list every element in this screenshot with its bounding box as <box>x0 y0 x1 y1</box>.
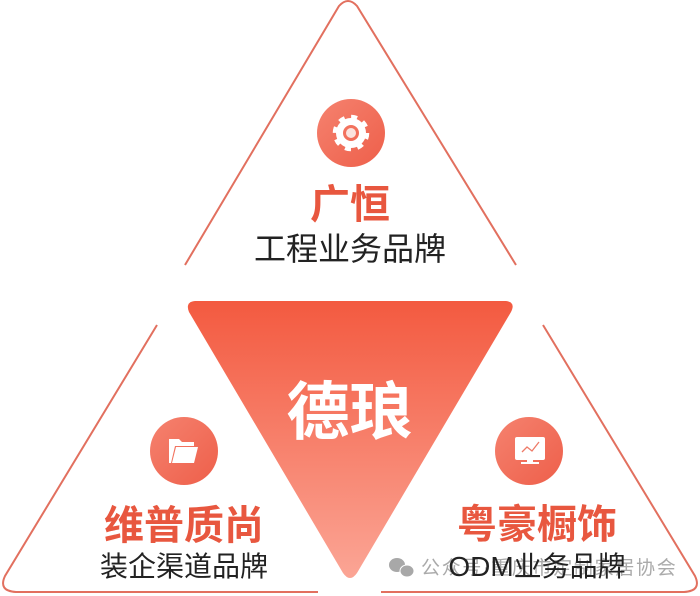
heading: 广恒: 广恒 <box>310 183 390 227</box>
subheading: ODM业务品牌: ODM业务品牌 <box>448 551 626 582</box>
icon: monitor chart <box>495 417 563 485</box>
icon: wechat logo <box>389 558 414 577</box>
icon: folder <box>150 417 218 485</box>
heading: 粤豪橱饰: 粤豪橱饰 <box>457 503 617 547</box>
icon: gear <box>317 99 385 167</box>
panel: left triangle outline <box>3 325 318 592</box>
watermark text: 公众号·重庆市定制家居协会 <box>421 557 677 579</box>
panel: top triangle outline <box>185 1 516 265</box>
center inverted triangle <box>188 301 513 578</box>
subheading: 装企渠道品牌: 装企渠道品牌 <box>100 551 268 582</box>
subheading: 工程业务品牌: 工程业务品牌 <box>254 231 446 267</box>
heading: 维普质尚: 维普质尚 <box>104 504 264 548</box>
center title: 德琅 <box>286 378 412 448</box>
panel: right triangle outline <box>381 325 697 592</box>
watermark <box>389 557 677 579</box>
